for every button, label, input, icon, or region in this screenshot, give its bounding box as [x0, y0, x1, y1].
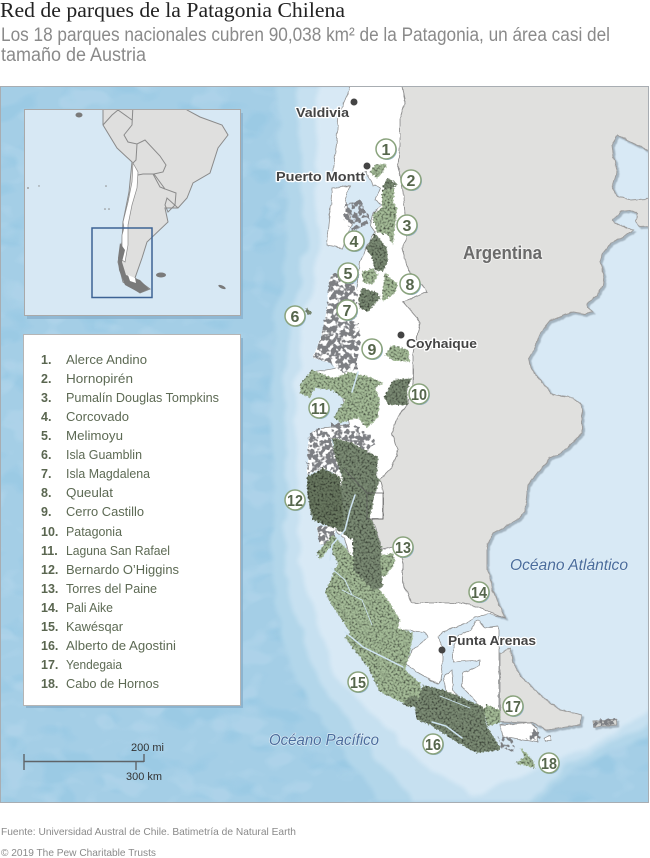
study area rectangle [92, 228, 152, 298]
list items: Isla Magdalena [66, 467, 150, 481]
marker 16 [423, 734, 444, 755]
marker 6 [285, 306, 306, 327]
marker 12: 12 [287, 493, 303, 510]
list items: 18. [41, 677, 58, 691]
list items [41, 353, 219, 691]
marker 6: 6 [291, 309, 300, 326]
marker 9 [362, 339, 383, 360]
list items: Bernardo O’Higgins [66, 563, 179, 577]
marker 11 [309, 398, 330, 419]
marker 12 [285, 490, 306, 511]
fjords across dark parks [330, 495, 470, 738]
list items: 12. [41, 563, 58, 577]
list items: Cerro Castillo [66, 505, 144, 519]
city: Punta Arenas [438, 633, 536, 654]
list items: 7. [41, 467, 51, 481]
marker 10 [409, 384, 430, 405]
list items: Melimoyu [66, 429, 123, 443]
marker 3 [397, 215, 418, 236]
label: Océano Pacífico: Océano Pacífico [269, 732, 379, 749]
city: Valdivia [296, 98, 358, 120]
marker 5: 5 [344, 266, 353, 283]
marker 7: 7 [343, 303, 352, 320]
subtitle [1, 25, 610, 66]
city: Coyhaique [398, 332, 477, 351]
park 12, western unit [307, 468, 343, 528]
list items: Hornopirén [66, 372, 133, 386]
label: Océano Atlántico: Océano Atlántico [510, 557, 628, 574]
marker 3: 3 [403, 218, 412, 235]
marker 1 [376, 139, 397, 160]
marker 13: 13 [395, 540, 411, 557]
scale bar [24, 742, 164, 783]
list items: 14. [41, 601, 58, 615]
marker 2 [401, 170, 422, 191]
land: Chile mainland and islands [307, 80, 551, 742]
list items: Kawésqar [66, 620, 123, 634]
park polygons, dark green [305, 178, 500, 753]
subtitle: tamaño de Austria [1, 45, 146, 66]
marker 14: 14 [471, 585, 487, 602]
list items: 6. [41, 448, 51, 462]
list items: Pali Aike [66, 601, 113, 615]
park polygons, light green [300, 164, 535, 768]
list items: Corcovado [66, 410, 129, 424]
marker 4: 4 [350, 234, 359, 251]
city: Puerto Montt: Puerto Montt [276, 169, 366, 184]
list items: 4. [41, 410, 51, 424]
city: Puerto Montt [276, 162, 370, 184]
marker 8 [400, 274, 421, 295]
marker 8: 8 [406, 277, 415, 294]
marker 11: 11 [311, 401, 327, 418]
list items: Laguna San Rafael [66, 544, 170, 558]
marker 10: 10 [411, 387, 427, 404]
land: Argentina [372, 80, 650, 730]
city: Valdivia: Valdivia [296, 105, 350, 120]
list items: 1. [41, 353, 51, 367]
marker 13 [393, 537, 414, 558]
marker 1: 1 [382, 142, 391, 159]
list items: 15. [41, 620, 58, 634]
list items: 13. [41, 582, 58, 596]
list items: 9. [41, 505, 51, 519]
list items: Queulat [66, 486, 114, 500]
list items: 3. [41, 391, 51, 405]
marker 17: 17 [505, 699, 521, 716]
marker 14 [469, 582, 490, 603]
marker 16: 16 [425, 737, 441, 754]
list items: 2. [41, 372, 51, 386]
marker 9: 9 [368, 342, 377, 359]
marker 17 [503, 696, 524, 717]
South America land [27, 105, 228, 293]
list items: Yendegaia [66, 658, 122, 672]
list items: 5. [41, 429, 51, 443]
marker 4 [344, 231, 365, 252]
scale bar: 200 mi [131, 742, 164, 754]
city: Punta Arenas: Punta Arenas [448, 633, 536, 648]
list items: 11. [41, 544, 58, 558]
list items: Pumalín Douglas Tompkins [66, 391, 219, 405]
marker 5 [338, 263, 359, 284]
list items: Alberto de Agostini [66, 639, 176, 653]
water channels [331, 372, 403, 667]
gray island archipelagos [307, 200, 617, 753]
list items: Patagonia [66, 525, 122, 539]
marker 18: 18 [541, 756, 557, 773]
panel: locator inset [24, 105, 243, 319]
source note: Fuente: Universidad Austral de Chile. Batimetría de Natural Earth [1, 826, 296, 838]
list items: 17. [41, 658, 58, 672]
list items: Alerce Andino [66, 353, 147, 367]
list items: 10. [41, 525, 58, 539]
marker 18 [539, 753, 560, 774]
list items: Cabo de Hornos [66, 677, 159, 691]
marker 15: 15 [350, 675, 366, 692]
scale bar: 300 km [126, 771, 162, 783]
label: Argentina: Argentina [463, 243, 543, 263]
marker 15 [348, 672, 369, 693]
panel: park list [24, 334, 243, 708]
marker 2: 2 [407, 173, 416, 190]
list items: 16. [41, 639, 58, 653]
Park boundary notch [344, 469, 383, 519]
list items: Torres del Paine [66, 582, 157, 596]
list items: Isla Guamblin [66, 448, 142, 462]
marker 7 [337, 300, 358, 321]
city: Coyhaique: Coyhaique [406, 336, 477, 351]
list items: 8. [41, 486, 51, 500]
